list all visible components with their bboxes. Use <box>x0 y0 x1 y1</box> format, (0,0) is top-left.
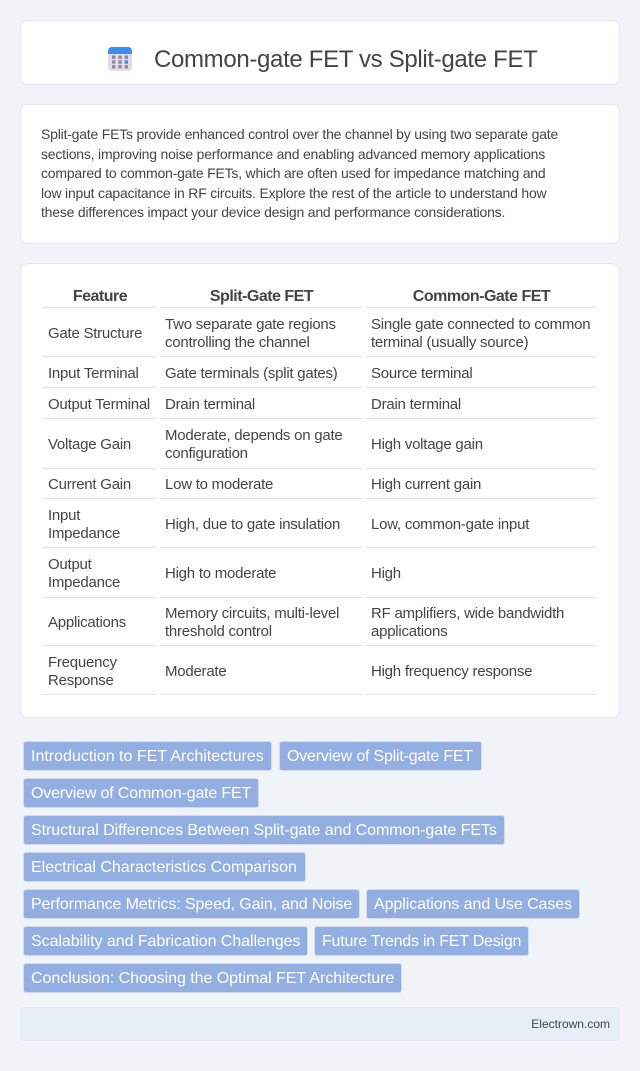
tag: Scalability and Fabrication Challenges <box>31 933 300 950</box>
table row: output terminal: Drain terminal <box>165 396 255 413</box>
table row: input impedance: High, due to gate insulation <box>165 516 340 533</box>
tag <box>366 889 580 919</box>
tag: Applications and Use Cases <box>374 896 572 913</box>
tag: Structural Differences Between Split-gate and Common-gate FETs <box>31 822 497 839</box>
tag: Performance Metrics: Speed, Gain, and Noise <box>31 896 352 913</box>
table row: current gain: Current Gain <box>48 476 131 493</box>
table row: current gain <box>42 476 597 499</box>
table row: applications: Memory circuits, multi-level <box>165 605 339 622</box>
intro text: Split-gate FETs provide enhanced control over the channel by using two separate gate <box>41 126 558 142</box>
table row: current gain: Low to moderate <box>165 476 273 493</box>
table row: voltage gain: configuration <box>165 445 248 462</box>
table row: input terminal: Gate terminals (split gates) <box>165 365 338 382</box>
table header row: Split-Gate FET <box>210 288 313 305</box>
table row: applications: threshold control <box>165 623 272 640</box>
tag <box>23 778 259 808</box>
icon: calendar grid <box>108 47 132 71</box>
tag: Introduction to FET Architectures <box>31 748 264 765</box>
tag: Conclusion: Choosing the Optimal FET Architecture <box>31 970 394 987</box>
tag: Overview of Common-gate FET <box>31 785 251 802</box>
table row: output impedance: Impedance <box>48 574 120 591</box>
table row: applications: Applications <box>48 614 126 631</box>
table header row: Common-Gate FET <box>413 288 550 305</box>
table row: frequency response: High frequency response <box>371 663 532 680</box>
table row: output impedance: Output <box>48 556 92 573</box>
footer bar <box>20 1007 620 1041</box>
tag <box>23 741 272 771</box>
table row: input impedance: Low, common-gate input <box>371 516 529 533</box>
table row: gate structure: terminal (usually source) <box>371 334 528 351</box>
intro text: compared to common-gate FETs, which are often used for impedance matching and <box>41 165 545 181</box>
table row: voltage gain <box>42 427 597 469</box>
tag <box>23 852 306 882</box>
table row: gate structure <box>42 316 597 357</box>
table row: input terminal <box>42 365 597 388</box>
table row: gate structure: Two separate gate regions <box>165 316 336 333</box>
table row: input impedance <box>42 507 597 548</box>
panel: intro card <box>20 104 620 244</box>
intro text: these differences impact your device design and performance considerations. <box>41 204 505 220</box>
table row: frequency response <box>42 654 597 695</box>
table row: applications: applications <box>371 623 447 640</box>
intro text <box>41 126 558 220</box>
tag <box>23 889 360 919</box>
tag: Electrical Characteristics Comparison <box>31 859 297 876</box>
table row: output terminal: Output Terminal <box>48 396 150 413</box>
table row: output terminal: Drain terminal <box>371 396 461 413</box>
intro text: low input capacitance in RF circuits. Explore the rest of the article to understand how <box>41 185 546 201</box>
table row: gate structure: Gate Structure <box>48 325 142 342</box>
tag <box>23 926 308 956</box>
table row: input impedance: Impedance <box>48 525 120 542</box>
table row: output impedance <box>42 556 597 598</box>
table header row <box>42 288 597 308</box>
title card <box>20 20 620 85</box>
table row: current gain: High current gain <box>371 476 481 493</box>
table row: frequency response: Response <box>48 672 114 689</box>
table row: input terminal: Source terminal <box>371 365 472 382</box>
table row: applications: RF amplifiers, wide bandwidth <box>371 605 564 622</box>
tag <box>314 926 529 956</box>
intro text: sections, improving noise performance and enabling advanced memory applications <box>41 146 545 162</box>
table row: output terminal <box>42 396 597 419</box>
table row: voltage gain: High voltage gain <box>371 436 483 453</box>
table row: output impedance: High <box>371 565 401 582</box>
tag <box>279 741 482 771</box>
table header row: Feature <box>73 288 127 305</box>
table row: gate structure: Single gate connected to common <box>371 316 590 333</box>
table row: frequency response: Frequency <box>48 654 117 671</box>
title: Common-gate FET vs Split-gate FET <box>154 46 537 73</box>
table row: gate structure: controlling the channel <box>165 334 310 351</box>
tag <box>23 963 402 993</box>
topic tags <box>23 741 580 993</box>
table row: frequency response: Moderate <box>165 663 226 680</box>
panel: comparison table card <box>20 263 620 718</box>
tag: Future Trends in FET Design <box>322 933 521 950</box>
table row: voltage gain: Voltage Gain <box>48 436 131 453</box>
table row: output impedance: High to moderate <box>165 565 276 582</box>
table row: input impedance: Input <box>48 507 80 524</box>
table row: voltage gain: Moderate, depends on gate <box>165 427 342 444</box>
table row: applications <box>42 605 597 646</box>
tag: Overview of Split-gate FET <box>287 748 473 765</box>
footer credit: Electrown.com <box>531 1017 610 1031</box>
table row: input terminal: Input Terminal <box>48 365 139 382</box>
tag <box>23 815 505 845</box>
